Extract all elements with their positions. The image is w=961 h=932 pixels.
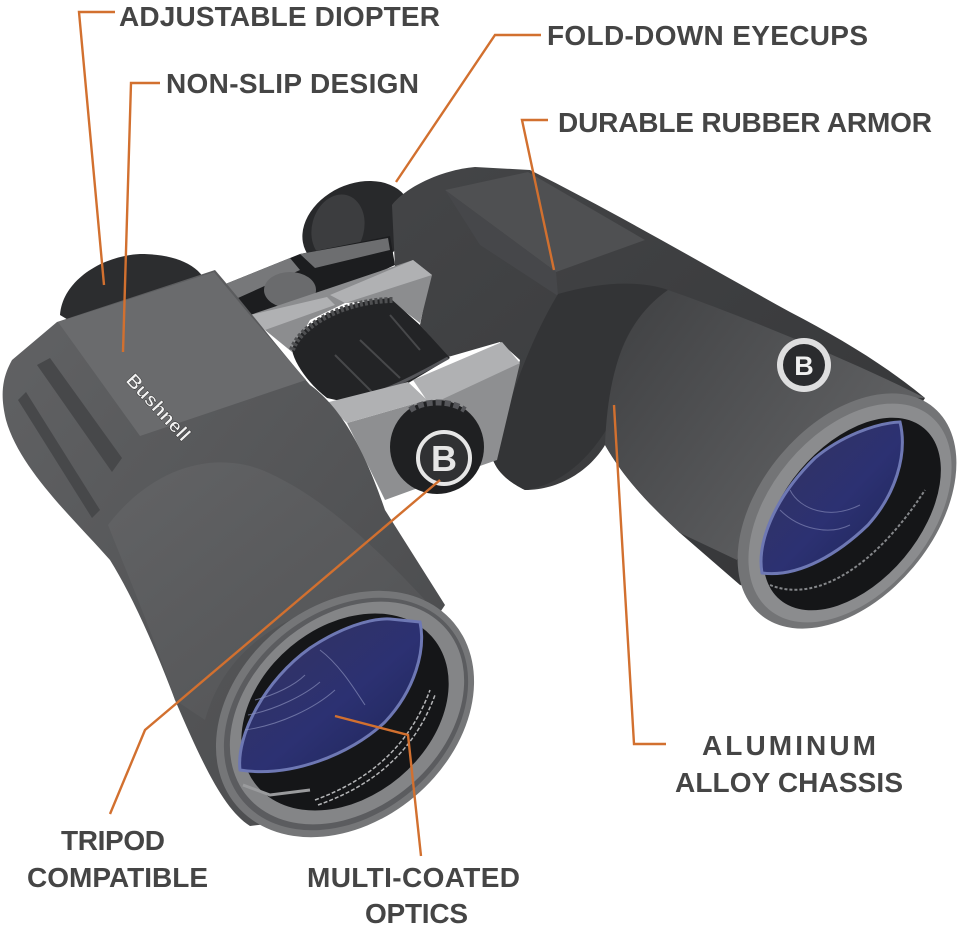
bridge bar: upper xyxy=(250,260,432,352)
upper hinge assembly xyxy=(223,236,395,320)
brand mark: Bushnell xyxy=(121,370,194,446)
binoculars illustration xyxy=(3,164,961,888)
armor panel xyxy=(445,172,645,272)
rear eyecup: right barrel xyxy=(288,164,426,288)
logo badge: B xyxy=(794,351,814,381)
line: non-slip design xyxy=(123,83,160,352)
top plate xyxy=(58,272,306,436)
label: non-slip design: NON-SLIP DESIGN xyxy=(166,68,419,99)
label: multi-coated optics xyxy=(307,862,520,929)
label: aluminum alloy chassis: ALUMINUM xyxy=(702,730,876,761)
line: tripod compatible xyxy=(110,480,440,814)
label: multi-coated optics: MULTI-COATED xyxy=(307,862,520,893)
rear eyecup: left barrel xyxy=(60,254,205,345)
barrel sleeve xyxy=(605,290,925,560)
label: durable rubber armor: DURABLE RUBBER ARMOR xyxy=(558,107,932,138)
tripod adapter knob xyxy=(390,400,484,494)
right objective lens xyxy=(694,352,961,670)
leader lines xyxy=(79,12,666,856)
label: multi-coated optics: OPTICS xyxy=(365,898,468,929)
label: tripod compatible: TRIPOD xyxy=(61,825,165,856)
barrel sleeve xyxy=(108,462,425,720)
label: adjustable diopter: ADJUSTABLE DIOPTER xyxy=(119,1,440,32)
line: adjustable diopter xyxy=(79,12,115,285)
left barrel body xyxy=(3,270,445,826)
label: aluminum alloy chassis: ALLOY CHASSIS xyxy=(675,767,903,798)
label: tripod compatible xyxy=(27,825,208,893)
label: tripod compatible: COMPATIBLE xyxy=(27,862,208,893)
line: durable rubber armor xyxy=(522,120,554,270)
line: fold-down eyecups xyxy=(396,35,541,182)
line: multi-coated optics xyxy=(335,716,421,856)
focus wheel xyxy=(292,298,450,402)
label: aluminum alloy chassis xyxy=(675,730,903,798)
right barrel body xyxy=(392,167,925,600)
logo badge xyxy=(777,338,831,392)
shoulder xyxy=(493,284,668,490)
grip grooves xyxy=(37,358,122,472)
line: aluminum alloy chassis xyxy=(614,405,666,744)
tripod adapter knob: B xyxy=(431,438,457,479)
bridge bar: lower xyxy=(325,342,520,500)
label: fold-down eyecups: FOLD-DOWN EYECUPS xyxy=(547,20,868,51)
left objective lens xyxy=(167,540,523,888)
